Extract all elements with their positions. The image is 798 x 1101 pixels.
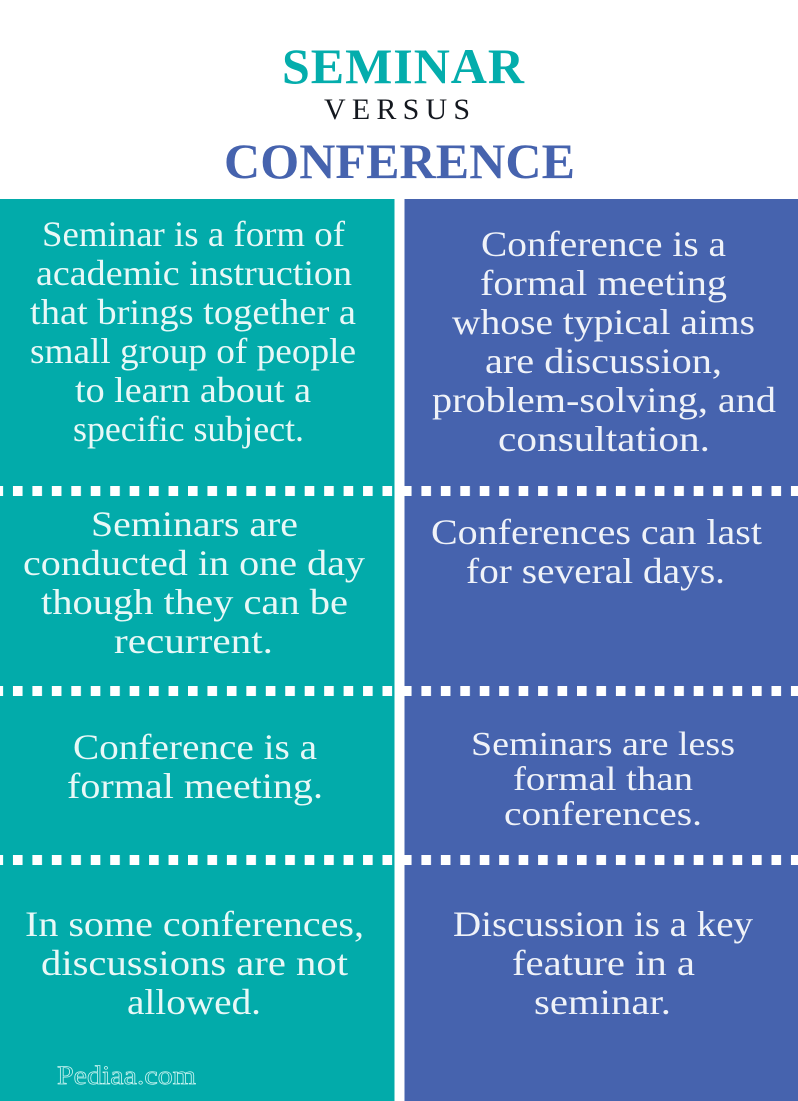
- text: seminar duration: though they can be: [41, 582, 348, 622]
- text: seminar duration: Seminars are: [91, 504, 298, 544]
- text: seminar duration: [23, 504, 365, 661]
- text: conference definition: consultation.: [498, 419, 710, 459]
- text: seminar formality: formal than: [513, 761, 693, 798]
- text: seminar definition: specific subject.: [73, 409, 304, 449]
- panel: conference column: [404, 199, 798, 1101]
- text: seminar formality: [471, 726, 735, 833]
- text: seminar definition: small group of people: [30, 331, 356, 371]
- text: seminar definition: to learn about a: [75, 370, 311, 410]
- logo: Pediaa.com: Pediaa.com: [57, 1061, 196, 1090]
- text: conference formality: Conference is a: [73, 727, 317, 767]
- text: conference formality: formal meeting.: [67, 766, 323, 806]
- text: seminar formality: Seminars are less: [471, 726, 735, 763]
- title: [224, 38, 575, 189]
- text: seminar formality: conferences.: [504, 796, 702, 833]
- text: conference definition: whose typical aims: [452, 302, 755, 342]
- text: seminar discussion: seminar.: [534, 982, 671, 1022]
- text: seminar definition: that brings together a: [30, 292, 356, 332]
- row divider 3: [0, 855, 798, 865]
- text: seminar duration: conducted in one day: [23, 543, 365, 583]
- row divider 2: [0, 686, 798, 696]
- text: conference duration: [431, 512, 762, 591]
- panel: seminar column: [0, 199, 394, 1101]
- text: conference definition: [432, 224, 776, 459]
- text: conference discussion: [25, 904, 364, 1022]
- text: seminar discussion: [453, 904, 753, 1022]
- heading: conference: CONFERENCE: [224, 133, 575, 189]
- text: seminar definition: [30, 214, 356, 449]
- text: conference discussion: discussions are not: [41, 943, 348, 983]
- text: seminar definition: academic instruction: [36, 253, 352, 293]
- text: conference definition: formal meeting: [480, 263, 727, 303]
- text: seminar duration: recurrent.: [114, 621, 273, 661]
- text: conference duration: for several days.: [466, 551, 725, 591]
- text: conference definition: are discussion,: [485, 341, 722, 381]
- text: conference definition: problem-solving, and: [432, 380, 776, 420]
- text: seminar discussion: Discussion is a key: [453, 904, 753, 944]
- text: seminar definition: Seminar is a form of: [42, 214, 345, 254]
- text: conference formality: [67, 727, 323, 806]
- heading: seminar: SEMINAR: [282, 38, 525, 94]
- text: conference definition: Conference is a: [481, 224, 726, 264]
- text: conference discussion: allowed.: [127, 982, 261, 1022]
- heading: versus: VERSUS: [324, 93, 470, 126]
- text: seminar discussion: feature in a: [512, 943, 695, 983]
- row divider 1: [0, 486, 798, 496]
- text: conference duration: Conferences can last: [431, 512, 762, 552]
- text: conference discussion: In some conferences,: [25, 904, 364, 944]
